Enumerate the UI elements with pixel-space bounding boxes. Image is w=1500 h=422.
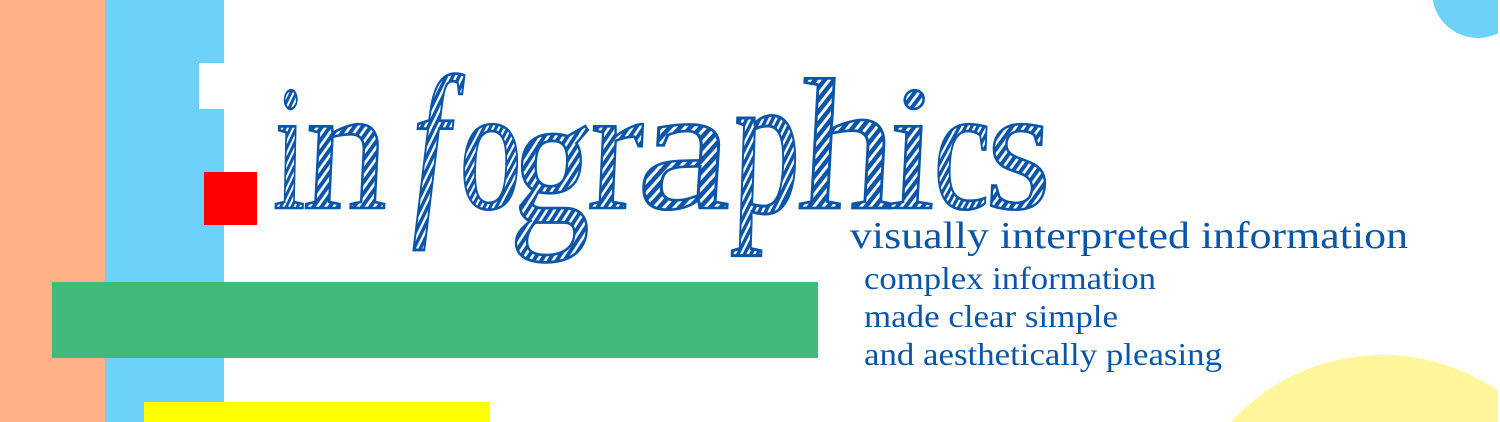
line: made clear simple: made clear simple xyxy=(864,298,1118,334)
title: o xyxy=(457,51,526,247)
title: r xyxy=(585,49,648,247)
title: a xyxy=(633,50,740,247)
title: c xyxy=(931,50,995,247)
pale yellow circle xyxy=(1231,355,1498,422)
title: i xyxy=(272,50,309,247)
title: n xyxy=(300,49,394,247)
title: i xyxy=(883,49,943,247)
description text xyxy=(864,260,1222,372)
yellow bar xyxy=(144,402,490,422)
title: h xyxy=(794,42,903,249)
title xyxy=(272,29,1058,263)
title: s xyxy=(982,49,1058,247)
title: p xyxy=(729,29,805,257)
orange vertical band xyxy=(0,0,105,422)
line: and aesthetically pleasing: and aesthetically pleasing xyxy=(864,336,1222,372)
title: f xyxy=(412,38,465,251)
white notch xyxy=(199,63,224,109)
red square xyxy=(204,172,257,225)
title: g xyxy=(508,56,598,263)
blue corner circle xyxy=(1433,0,1498,38)
blue vertical band xyxy=(105,0,224,422)
green bar xyxy=(52,282,818,358)
subtitle: visually interpreted information xyxy=(850,215,1408,257)
line: complex information: complex information xyxy=(864,260,1156,296)
